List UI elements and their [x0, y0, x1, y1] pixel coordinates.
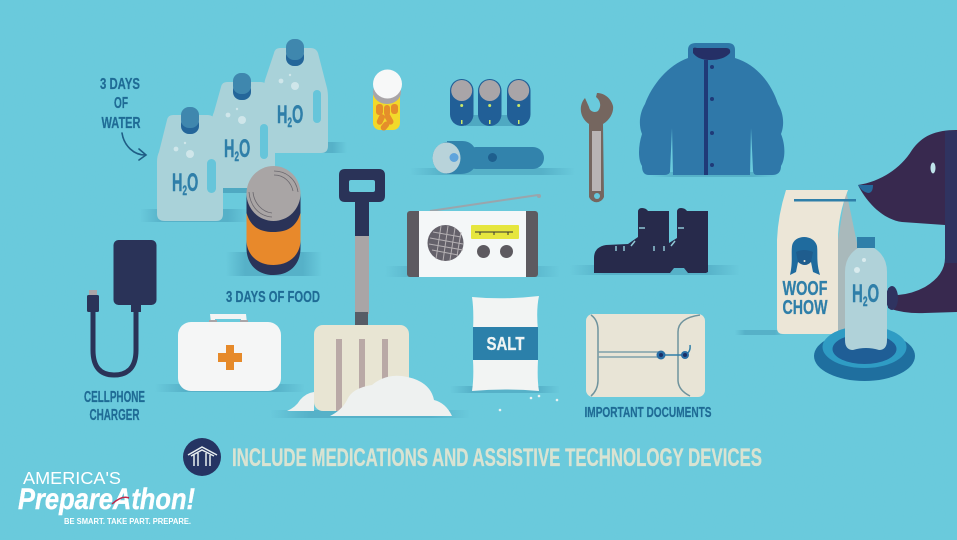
dog logo [790, 237, 820, 275]
phone charger [87, 240, 156, 375]
water jug middle: O [239, 136, 250, 163]
water jug front: H [172, 170, 182, 197]
label: 3 days of water: WATER [102, 115, 140, 132]
water jug front [140, 107, 250, 222]
label: cellphone charger: CHARGER [90, 407, 140, 424]
water bottle [845, 237, 887, 350]
label: cellphone charger: CELLPHONE [84, 389, 145, 406]
snow shovel [270, 169, 470, 418]
first aid kit [155, 314, 305, 392]
water jug back [264, 39, 347, 153]
dog food bag: CHOW [782, 297, 828, 319]
badge icon: house [183, 438, 221, 476]
water bottle: 2 [863, 295, 868, 310]
water jug middle [212, 73, 275, 193]
water jug front: 2 [182, 184, 187, 199]
water jug back: O [292, 102, 303, 129]
label: 3 days of water: 3 DAYS [100, 76, 140, 93]
label: 3 days of water: OF [114, 95, 128, 112]
dog food bag: WOOF [782, 278, 828, 300]
water jug middle: H [224, 136, 234, 163]
logo: America's PrepareAthon! [18, 468, 195, 526]
water jug middle: 2 [234, 150, 239, 165]
water jug back: 2 [287, 116, 292, 131]
water bottle: O [868, 280, 879, 308]
label: 3 days of water [100, 76, 140, 132]
arrow [122, 133, 146, 160]
dog [858, 130, 957, 313]
flashlight [410, 141, 575, 175]
boots [570, 208, 740, 275]
logo: America's PrepareAthon!: BE SMART. TAKE PART. PREPARE. [64, 517, 191, 526]
wrench [581, 93, 613, 202]
jacket [639, 43, 784, 177]
pill bottle [373, 70, 402, 132]
label: important documents: IMPORTANT DOCUMENTS [584, 404, 712, 421]
dog food bag [735, 190, 868, 336]
salt bag: SALT [486, 334, 524, 354]
water jug back: H [277, 102, 287, 129]
logo: America's PrepareAthon!: PrepareAthon! [18, 483, 195, 516]
batteries [450, 79, 530, 126]
logo: America's PrepareAthon!: AMERICA'S [23, 468, 121, 488]
important documents envelope [586, 314, 705, 397]
water bottle: H [852, 280, 863, 308]
canned food [226, 166, 322, 276]
water bowl [814, 326, 915, 381]
radio [385, 194, 560, 277]
salt bag [450, 296, 560, 411]
water jug front: O [187, 170, 198, 197]
label: cellphone charger [84, 389, 145, 424]
label: 3 days of food: 3 DAYS OF FOOD [226, 289, 320, 306]
